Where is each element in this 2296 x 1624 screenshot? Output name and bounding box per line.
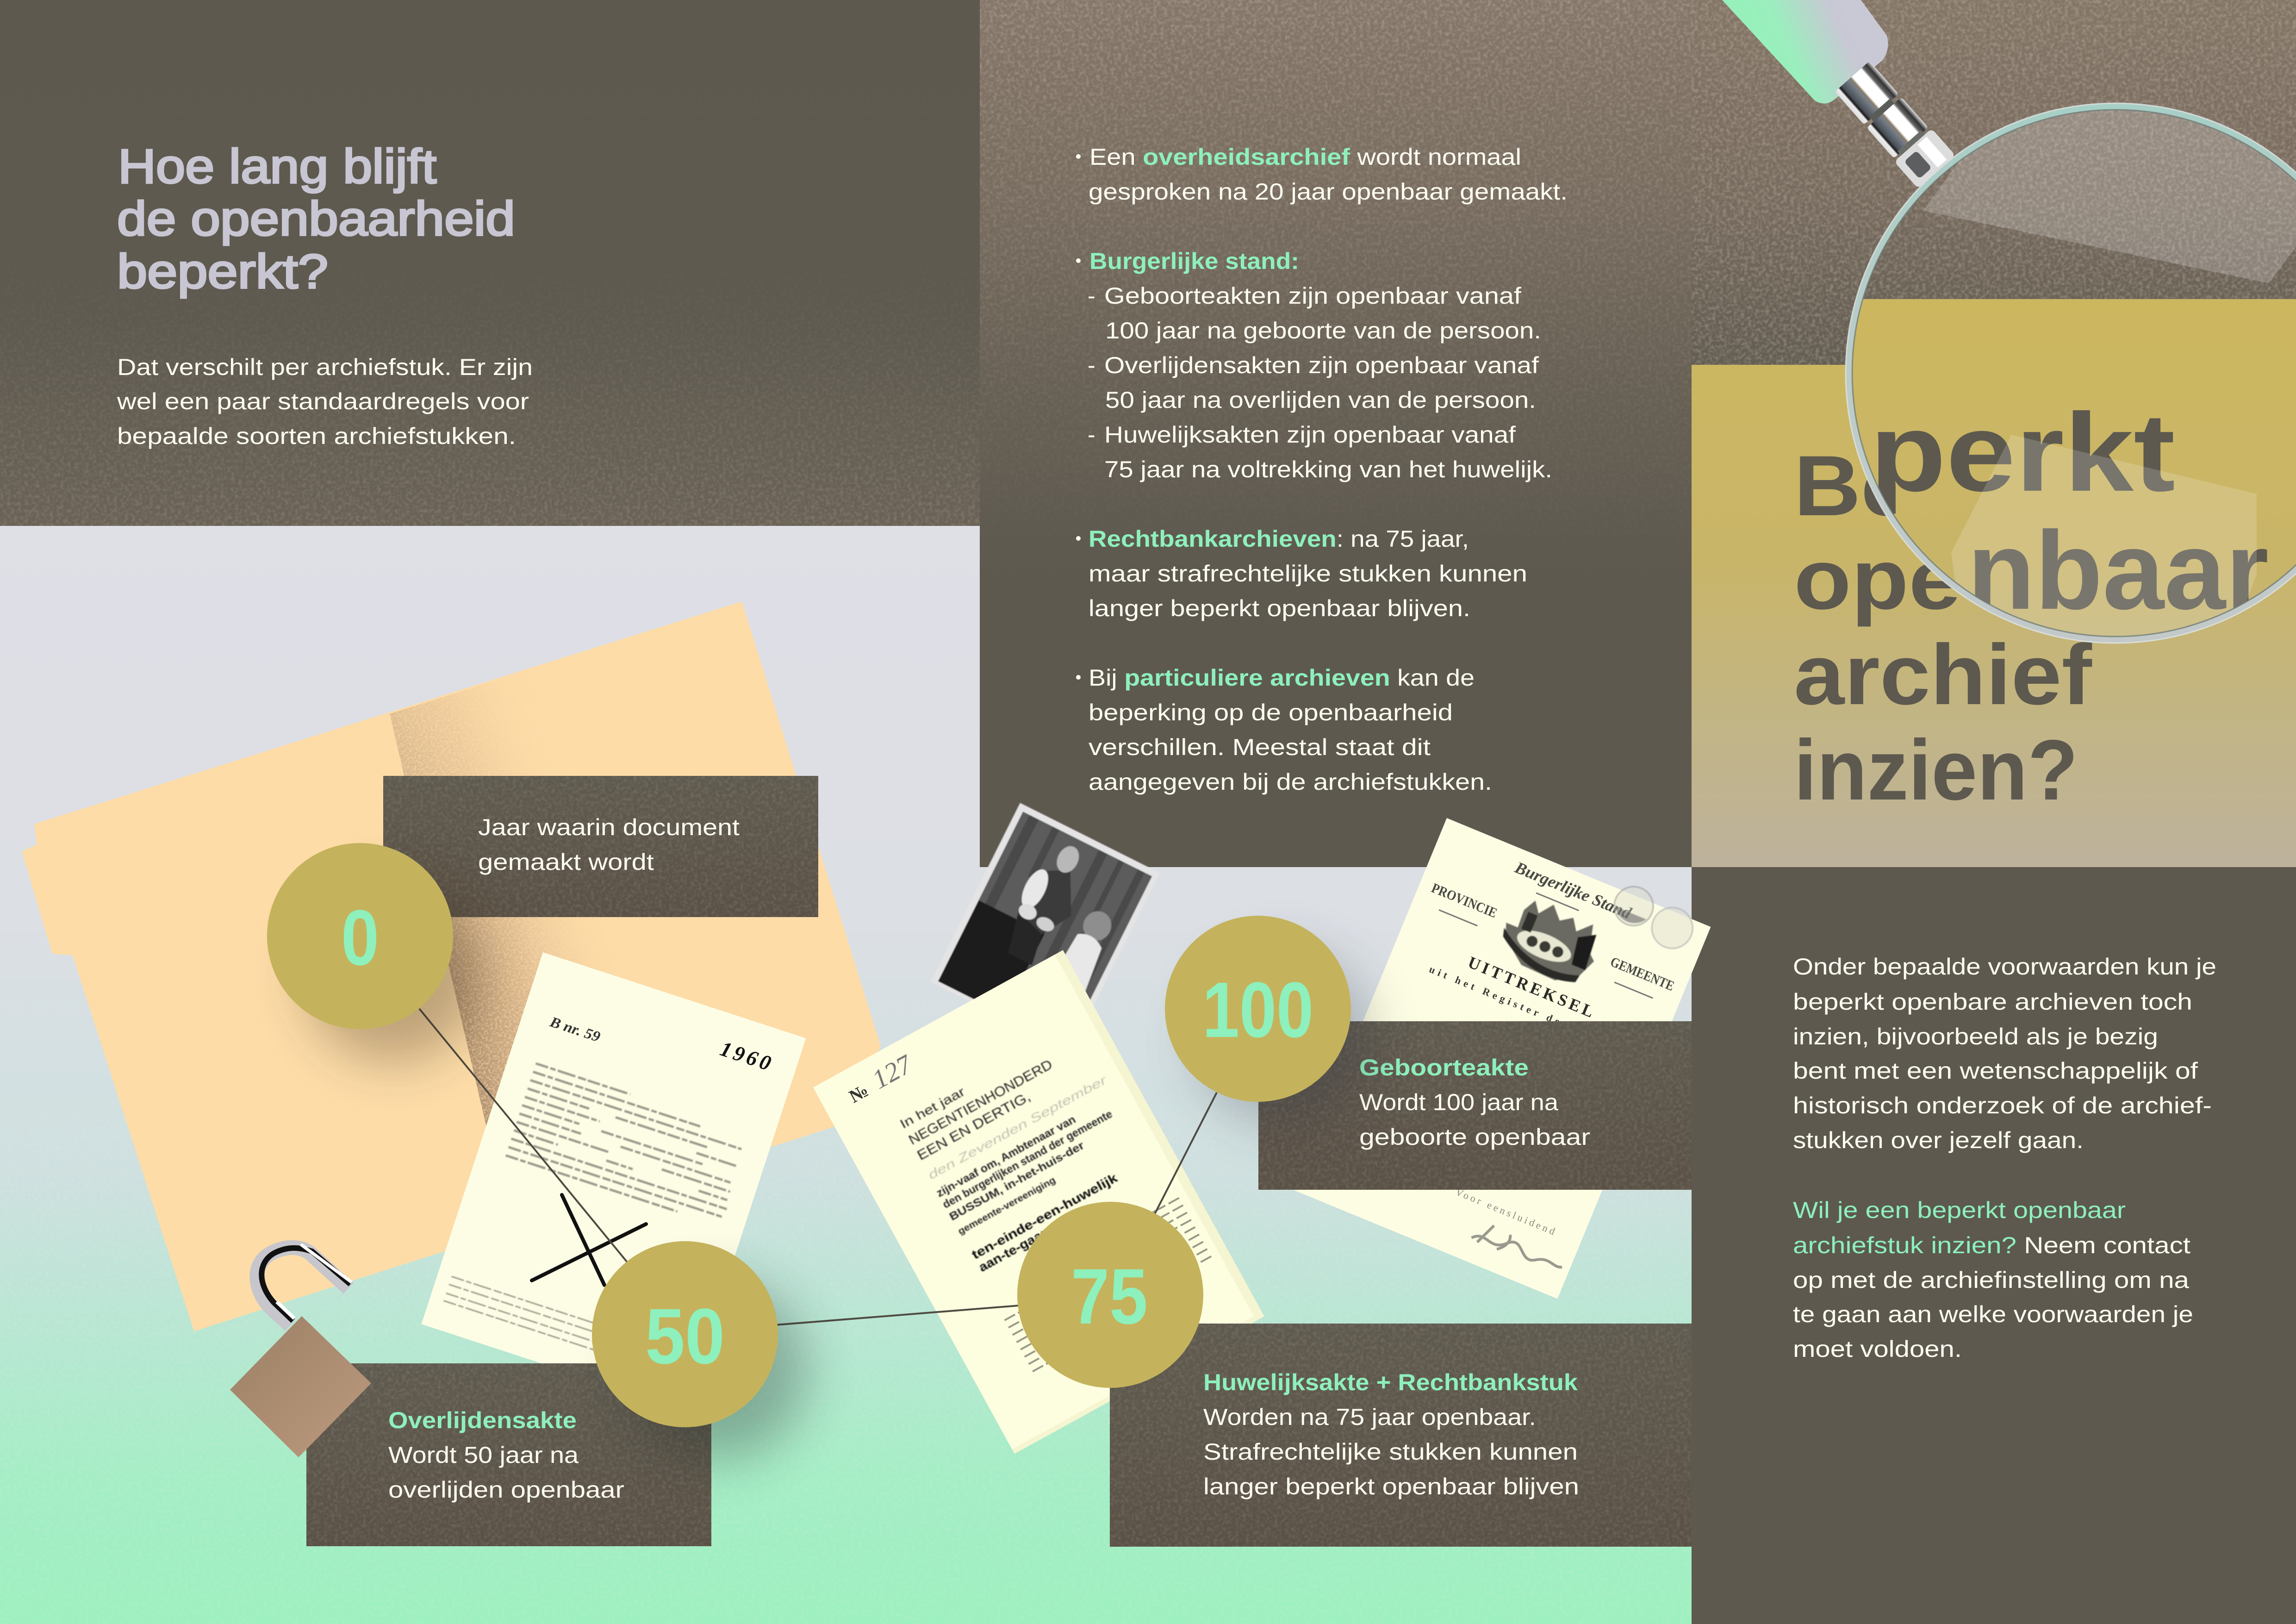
folder fold shade [390, 689, 576, 1126]
rule: particuliere archieven: beperking op de openbaarheid [1089, 700, 1453, 725]
printed text: den burgerlijken stand der gemeente [940, 1108, 1114, 1211]
paragraph: contact: te gaan aan welke voorwaarden je [1793, 1301, 2193, 1327]
header rules [1439, 861, 1673, 998]
paragraph: voorwaarden: historisch onderzoek of de archief- [1793, 1093, 2212, 1118]
paragraph: contact: moet voldoen. [1793, 1336, 1962, 1362]
typed lines [444, 1059, 751, 1375]
archival photo [931, 803, 1160, 1052]
label box: jaar: Jaar waarin document [478, 814, 740, 840]
yellow title panel [1692, 365, 2296, 867]
label box: huwelijksakte: Worden na 75 jaar openbaar. [1203, 1404, 1536, 1430]
lens ring [1846, 103, 2296, 643]
label box: geboorteakte: Wordt 100 jaar na [1359, 1089, 1558, 1115]
heading: hoe lang blijft: Hoe lang blijft [118, 140, 436, 194]
padlock body [230, 1316, 371, 1457]
heading: hoe lang blijft: beperkt? [117, 245, 328, 299]
paragraph: voorwaarden: bent met een wetenschappelijk of [1793, 1058, 2198, 1084]
header text: PROVINCIE [1429, 881, 1500, 921]
circle: 75: 75 [1071, 1253, 1148, 1341]
rule: overheidsarchief: Een overheidsarchief wordt normaal [1089, 144, 1521, 170]
printed text: gemeente-vereeniging [956, 1175, 1058, 1237]
background gradient [0, 526, 2296, 1624]
printed text: den Zevenden September [926, 1073, 1109, 1182]
signature and footer: Voor eensluidend [1454, 1186, 1557, 1237]
paragraph: voorwaarden: Onder bepaalde voorwaarden kun je [1793, 954, 2216, 980]
margin scan lines [993, 1198, 1219, 1371]
rule: burgerlijke stand: - [1088, 422, 1095, 448]
document: birth certificate: uit het Register der [1428, 963, 1569, 1031]
label box: huwelijksakte: Huwelijksakte + Rechtbankstuk [1203, 1369, 1578, 1395]
label box: geboorteakte: geboorte openbaar [1359, 1124, 1590, 1150]
rule: burgerlijke stand: Burgerlijke stand: [1089, 248, 1299, 274]
circle: 100: 100 [1202, 966, 1313, 1054]
rule: burgerlijke stand: Overlijdensakten zijn openbaar vanaf [1104, 352, 1539, 378]
rule: particuliere archieven: Bij particuliere archieven kan de [1089, 665, 1475, 691]
rule: burgerlijke stand: 100 jaar na geboorte van de persoon. [1105, 318, 1541, 344]
label box: jaar [383, 776, 818, 917]
document: birth certificate [1294, 810, 1714, 1299]
main title: Be [1794, 438, 1912, 534]
label box: huwelijksakte: langer beperkt openbaar blijven [1203, 1474, 1579, 1499]
circle: 0 [267, 843, 484, 1062]
handwritten number [842, 1049, 918, 1109]
label box: overlijdensakte [306, 1363, 711, 1546]
title: uittreksel: UITTREKSEL [1465, 953, 1596, 1021]
label box: overlijdensakte: overlijden openbaar [388, 1477, 624, 1503]
header text [1429, 831, 1697, 994]
lens interior [1692, 56, 2296, 867]
paragraph: voorwaarden: beperkt openbare archieven toch [1793, 989, 2192, 1015]
rule: rechtbankarchieven: Rechtbankarchieven : na 75 jaar, [1089, 526, 1469, 552]
circle: 50 [592, 1241, 808, 1461]
header text: Burgerlijke Stand [1512, 858, 1635, 923]
folder [24, 602, 879, 1330]
rule: burgerlijke stand: 75 jaar na voltrekking van het huwelijk. [1104, 456, 1552, 482]
bottom right panel [1692, 867, 2296, 1624]
rule: rechtbankarchieven [1076, 526, 1527, 621]
signature and footer [1441, 1186, 1575, 1276]
top left panel [0, 0, 980, 526]
rule: burgerlijke stand: - [1088, 283, 1095, 309]
heading: hoe lang blijft: de openbaarheid [117, 192, 515, 246]
heading: hoe lang blijft [117, 140, 515, 299]
bride [1026, 903, 1126, 1042]
rule: burgerlijke stand: Geboorteakten zijn openbaar vanaf [1104, 283, 1521, 309]
padlock [230, 1244, 371, 1457]
document: 1960 certificate [421, 952, 806, 1410]
top right brown panel [1692, 0, 2296, 370]
groom [995, 835, 1099, 971]
stamps [1606, 881, 1700, 955]
handle grip [1722, 0, 1888, 104]
circle: 50: 50 [645, 1293, 725, 1380]
rule: rechtbankarchieven: langer beperkt openbaar blijven. [1089, 595, 1470, 621]
rule: particuliere archieven: verschillen. Meestal staat dit [1089, 734, 1431, 760]
magnifying glass [1692, 0, 2296, 867]
connector lines [419, 1009, 1217, 1328]
document number: B nr. 59 [548, 1013, 603, 1045]
rule: rechtbankarchieven: maar strafrechtelijke stukken kunnen [1089, 561, 1527, 587]
lens highlights [1923, 56, 2296, 283]
circle: 0: 0 [341, 894, 379, 982]
handwritten number: № [846, 1080, 872, 1107]
rule: burgerlijke stand: 50 jaar na overlijden van de persoon. [1105, 387, 1536, 413]
rules list [1076, 144, 1568, 795]
rule: particuliere archieven: aangegeven bij de archiefstukken. [1089, 769, 1492, 795]
rule: overheidsarchief: gesproken na 20 jaar openbaar gemaakt. [1089, 179, 1568, 205]
printed text: In het jaar [897, 1084, 967, 1131]
dark furniture [938, 900, 1045, 1014]
rule: burgerlijke stand: - [1088, 352, 1095, 378]
printed text: BUSSUM, in-het-huis-der [947, 1139, 1086, 1223]
main title: inzien? [1794, 723, 2078, 818]
paragraph: contact: archiefstuk inzien? Neem contact [1793, 1232, 2190, 1258]
paragraph: contact: op met de archiefinstelling om na [1793, 1267, 2189, 1293]
paragraph: voorwaarden [1793, 954, 2216, 1153]
label box: overlijdensakte: Wordt 50 jaar na [388, 1442, 579, 1468]
rule: overheidsarchief [1076, 144, 1568, 205]
label box: huwelijksakte [1110, 1324, 1692, 1547]
label box: overlijdensakte: Overlijdensakte [388, 1407, 577, 1433]
circle: 75 [1017, 1202, 1203, 1388]
middle panel [980, 0, 1692, 867]
header text: GEMEENTE [1608, 954, 1676, 994]
printed text: NEGENTIENHONDERD [906, 1057, 1055, 1148]
magnified title text [1870, 390, 2269, 632]
main title: ope [1794, 532, 1961, 627]
rule: particuliere archieven [1076, 665, 1492, 795]
label box: geboorteakte: Geboorteakte [1359, 1055, 1529, 1081]
curtain [945, 815, 1145, 1042]
metal ferrule [1834, 60, 1955, 188]
rule: burgerlijke stand [1076, 248, 1552, 482]
main title: archief [1794, 627, 2092, 723]
padlock shackle [257, 1244, 352, 1325]
paragraph: voorwaarden: stukken over jezelf gaan. [1793, 1127, 2084, 1153]
intro text: Dat verschilt per archiefstuk. Er zijn [117, 354, 533, 380]
coat of arms [1493, 891, 1608, 991]
intro text: bepaalde soorten archiefstukken. [117, 423, 516, 449]
background grain [0, 1111, 1692, 1624]
paragraph: contact: Wil je een beperkt openbaar [1793, 1197, 2126, 1223]
magnified title text: perkt [1870, 390, 2175, 514]
label box: huwelijksakte: Strafrechtelijke stukken kunnen [1203, 1439, 1578, 1465]
printed text: aan-te-gaan [976, 1224, 1052, 1274]
rule: burgerlijke stand: Huwelijksakten zijn openbaar vanaf [1104, 422, 1516, 448]
paragraph: contact [1793, 1197, 2193, 1362]
document cross mark [532, 1195, 646, 1285]
intro text [117, 354, 533, 449]
printed text: ten-einde-een-huwelijk [969, 1170, 1120, 1262]
printed text: zijn-vaaf om, Ambtenaar van [934, 1113, 1078, 1200]
handwritten number: 127 [867, 1049, 918, 1095]
magnified title text: nbaar [1967, 508, 2269, 632]
circle: 100 [1165, 916, 1370, 1125]
printed text: EEN EN DERTIG, [915, 1089, 1033, 1163]
main title [1794, 438, 2092, 818]
paragraph: voorwaarden: inzien, bijvoorbeeld als je bezig [1793, 1024, 2158, 1049]
document year: 1960 [717, 1037, 774, 1075]
label box: jaar: gemaakt wordt [478, 849, 654, 875]
intro text: wel een paar standaardregels voor [117, 388, 529, 414]
document: marriage record [813, 950, 1264, 1454]
label box: geboorteakte [1258, 1021, 1692, 1190]
printed text [896, 1021, 1160, 1275]
